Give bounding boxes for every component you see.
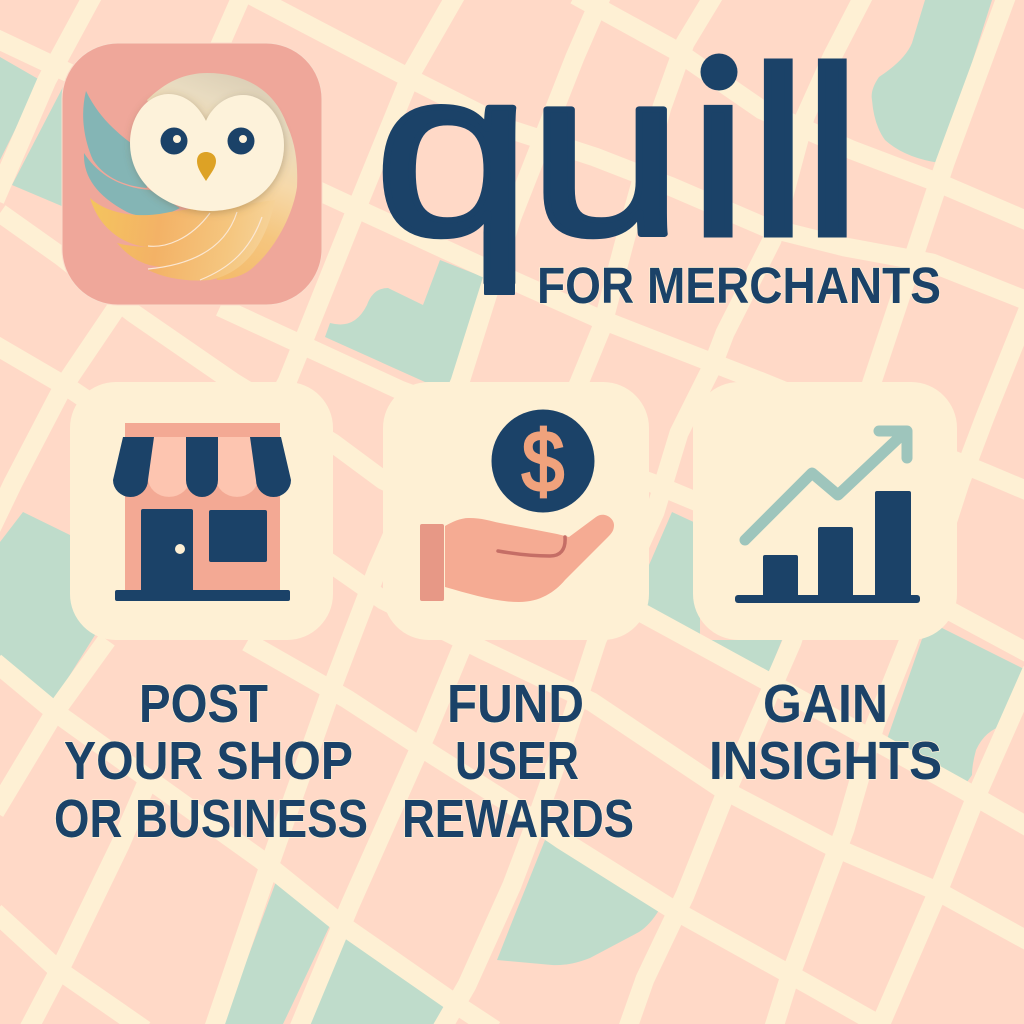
i dot (700, 54, 738, 90)
label: post your shop or business: POST (139, 674, 268, 734)
owl beak (197, 152, 216, 181)
wordmark: quill: l (752, 20, 804, 284)
owl wing: yellow feathers (90, 198, 275, 281)
wordmark: quill: u (529, 21, 683, 285)
label: gain insights: INSIGHTS (709, 731, 942, 791)
label: gain insights (709, 674, 942, 791)
owl wing: teal feathers (83, 91, 180, 216)
feather lines (148, 212, 262, 280)
icon: growth bar chart (735, 431, 920, 603)
wordmark: quill: l (806, 20, 858, 284)
label: gain insights: GAIN (763, 674, 888, 734)
owl body (147, 73, 297, 280)
icon: dollar coin: $ (522, 413, 564, 510)
icon: open hand (420, 515, 614, 602)
panel: fund rewards card (383, 382, 649, 640)
wordmark: quill (382, 58, 847, 295)
owl face (130, 94, 284, 211)
label: fund user rewards: REWARDS (402, 789, 634, 849)
subtitle: for merchants: FOR MERCHANTS (537, 257, 941, 314)
label: fund user rewards (402, 674, 634, 849)
app icon: owl logo (62, 43, 322, 305)
label: post your shop or business: YOUR SHOP (64, 731, 353, 791)
wordmark: quill: i (692, 20, 744, 284)
icon: dollar coin (492, 410, 594, 512)
panel: gain insights card (693, 382, 957, 640)
label: fund user rewards: FUND (447, 674, 584, 734)
label: post your shop or business: OR BUSINESS (54, 789, 368, 849)
panel: post shop card (70, 382, 333, 640)
icon: storefront (113, 423, 291, 601)
label: fund user rewards: USER (455, 731, 579, 791)
owl eyes (160, 128, 254, 154)
label: post your shop or business (54, 674, 368, 849)
trend arrow (745, 431, 907, 540)
wordmark: quill: q (374, 20, 531, 286)
